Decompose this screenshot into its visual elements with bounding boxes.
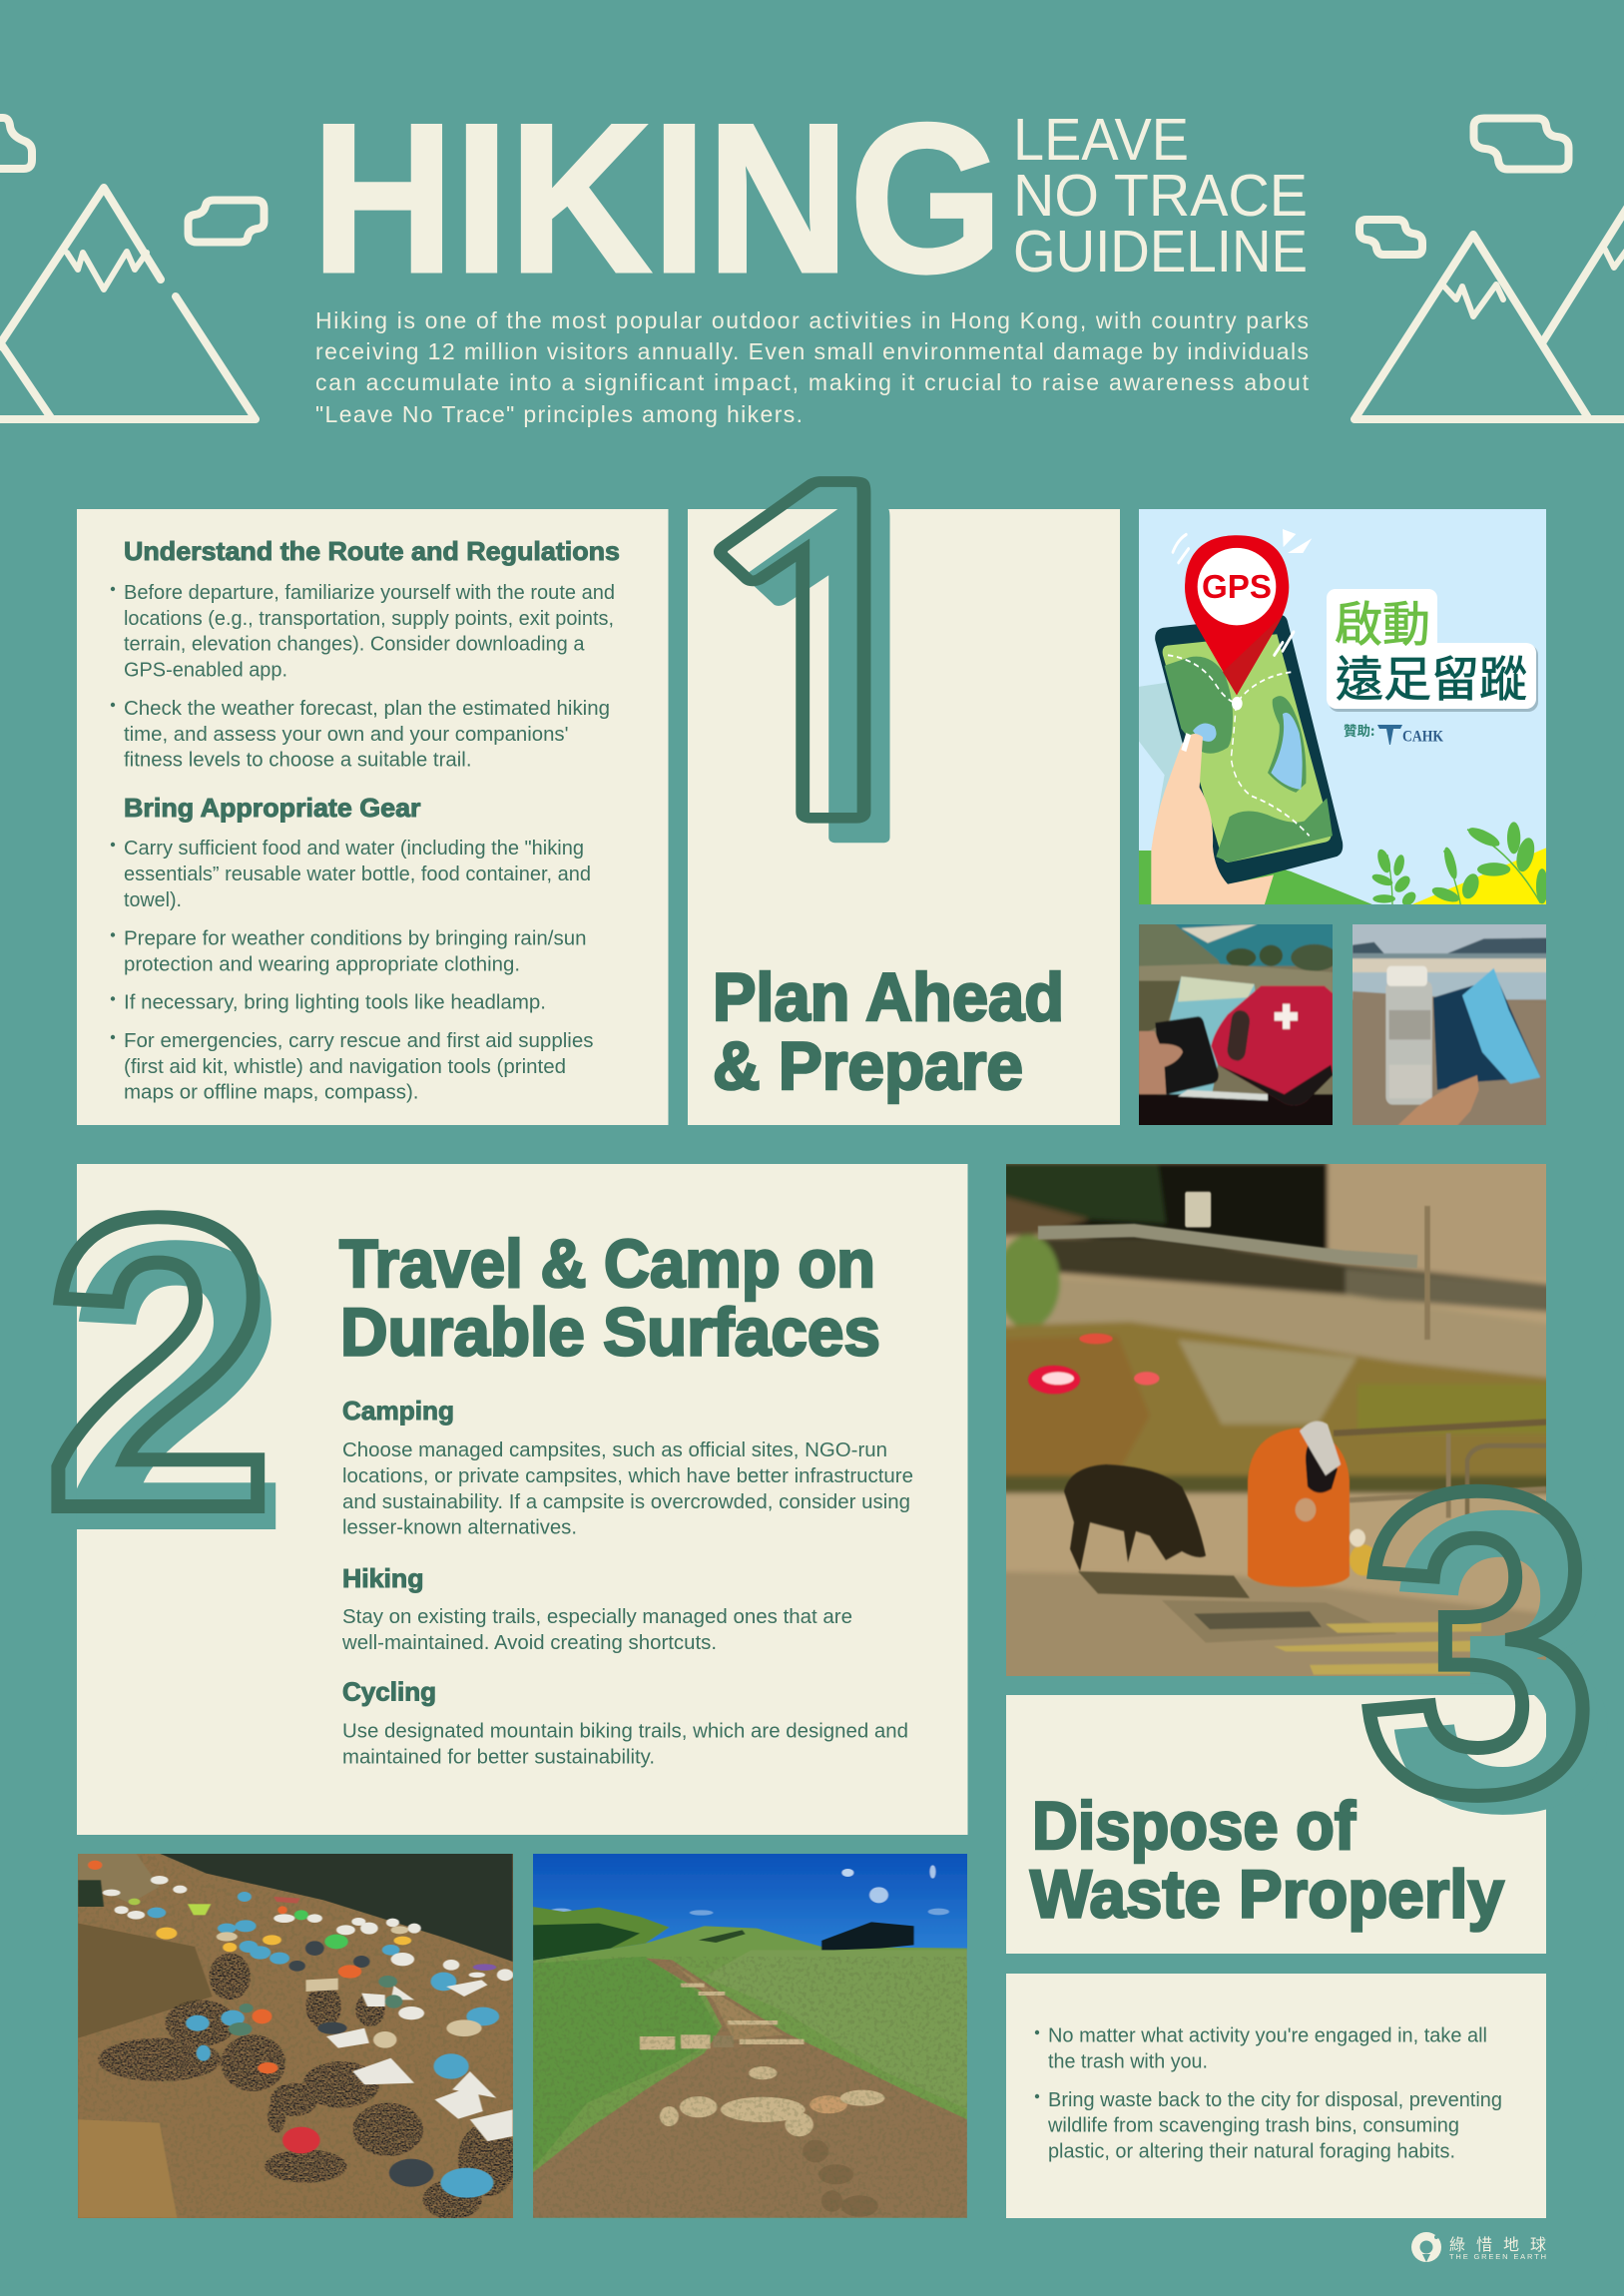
title: HIKING: HIKING [311, 80, 1003, 317]
subsection: camping: Choose managed campsites, such as official sites, NGO-run [342, 1439, 887, 1461]
number 2: 2 [62, 1154, 292, 1617]
intro paragraph: can accumulate into a significant impact, making it crucial to raise awareness about [315, 369, 1310, 395]
list: gear bullets: (first aid kit, whistle) and navigation tools (printed [124, 1056, 566, 1078]
intro paragraph: "Leave No Trace" principles among hikers. [315, 401, 803, 427]
subsection: hiking: well-maintained. Avoid creating shortcuts. [341, 1632, 717, 1654]
sponsor credit: CAHK [1402, 729, 1443, 745]
photo: crowded campsite [78, 1854, 517, 2219]
photo: water bottle and food pouch [1350, 919, 1549, 1130]
list: gear bullets: protection and wearing appropriate clothing. [124, 954, 520, 976]
list: route bullets: time, and assess your own and your companions' [124, 724, 569, 746]
heading: travel and camp [339, 1226, 880, 1370]
list: gear bullets: essentials” reusable water bottle, food container, and [124, 863, 591, 885]
subtitle: Leave No Trace Guideline: LEAVE [1013, 107, 1189, 173]
subsection: cycling: Use designated mountain biking trails, which are designed and [342, 1721, 908, 1743]
photo: wild boar at a rubbish bin [1006, 1164, 1546, 1676]
list: waste bullets: wildlife from scavenging trash bins, consuming [1047, 2114, 1459, 2136]
subsection: hiking [341, 1563, 852, 1654]
heading: understand the route: Understand the Route and Regulations [124, 536, 620, 566]
heading: plan ahead and prepare: & Prepare [713, 1028, 1023, 1104]
heading: plan ahead and prepare [713, 959, 1064, 1104]
photo: GPS app poster [1139, 509, 1548, 908]
logo: The Green Earth: THE GREEN EARTH [1449, 2252, 1546, 2261]
list: gear bullets: Prepare for weather conditions by bringing rain/sun [124, 928, 587, 950]
list: gear bullets: If necessary, bring lighting tools like headlamp. [124, 992, 546, 1014]
subsection: cycling [342, 1677, 908, 1769]
list: gear bullets: Carry sufficient food and water (including the "hiking [124, 838, 584, 860]
header illustration: left mountains and clouds [0, 118, 264, 419]
intro paragraph: receiving 12 million visitors annually. Even small environmental damage by individuals [315, 338, 1309, 364]
subsection: camping: locations, or private campsites, which have better infrastructure [342, 1465, 913, 1487]
heading: plan ahead and prepare: Plan Ahead [713, 959, 1064, 1035]
logo: The Green Earth: 綠惜地球 [1449, 2231, 1546, 2255]
subsection: camping: lesser-known alternatives. [342, 1517, 577, 1539]
list: waste bullets: No matter what activity you're engaged in, take all [1048, 2024, 1487, 2046]
number 3: 3 [1384, 1423, 1623, 1902]
number 1: 1 [647, 445, 994, 883]
photo: first aid kit and map [1135, 919, 1338, 1130]
list: route bullets [111, 582, 615, 771]
intro paragraph: Hiking is one of the most popular outdoor activities in Hong Kong, with country parks [315, 307, 1309, 333]
list: route bullets: Check the weather forecast, plan the estimated hiking [124, 698, 610, 720]
logo mark [1411, 2232, 1441, 2262]
subtitle: Leave No Trace Guideline [1013, 107, 1308, 285]
list: gear bullets: maps or offline maps, compass). [124, 1082, 419, 1104]
list: route bullets: terrain, elevation changes). Consider downloading a [124, 633, 585, 655]
list: route bullets: fitness levels to choose a suitable trail. [124, 749, 471, 771]
subtitle: Leave No Trace Guideline: NO TRACE [1013, 163, 1308, 229]
subsection: camping: Camping [342, 1396, 454, 1426]
intro paragraph [315, 307, 1310, 427]
subsection: cycling: Cycling [342, 1677, 436, 1707]
panel: dispose of waste title card [1006, 1695, 1546, 1954]
number 1: 1 [673, 470, 1020, 908]
heading: travel and camp: Travel & Camp on [339, 1226, 875, 1302]
panel: section 1 title card [688, 509, 1120, 1125]
sponsor credit [1344, 724, 1443, 745]
list: waste bullets: Bring waste back to the city for disposal, preventing [1048, 2089, 1502, 2111]
list: gear bullets: towel). [124, 889, 182, 911]
people clusters [98, 1954, 517, 2219]
poster title badges: 啟動 [1335, 585, 1430, 655]
subtitle: Leave No Trace Guideline: GUIDELINE [1013, 219, 1308, 285]
panel: travel and camp on durable surfaces [77, 1164, 968, 1835]
panel: waste guidance [1006, 1974, 1546, 2218]
subsection: camping [342, 1396, 913, 1539]
panel: plan ahead guidance [77, 509, 669, 1125]
subsection: hiking: Stay on existing trails, especially managed ones that are [342, 1606, 852, 1628]
list: waste bullets: the trash with you. [1048, 2050, 1208, 2072]
heading: dispose of waste properly [1030, 1788, 1504, 1933]
list: gear bullets [111, 838, 594, 1104]
number 3: 3 [1359, 1404, 1598, 1883]
photo: mountain trail under blue sky [529, 1850, 974, 2218]
poster title badges: 遠足留蹤 [1336, 640, 1527, 710]
heading: dispose of waste properly: Waste Properly [1030, 1857, 1504, 1933]
list: waste bullets [1035, 2024, 1502, 2162]
list: route bullets: GPS-enabled app. [124, 659, 287, 681]
logo: The Green Earth [1411, 2231, 1546, 2262]
list: route bullets: Before departure, familiarize yourself with the route and [124, 582, 615, 604]
subsection: camping: and sustainability. If a campsite is overcrowded, consider using [342, 1491, 910, 1513]
subsection: hiking: Hiking [342, 1563, 423, 1593]
subsection: cycling: maintained for better sustainability. [342, 1747, 655, 1769]
header illustration: right mountains and clouds [1354, 118, 1624, 419]
tents [147, 1892, 499, 2198]
sponsor credit: 贊助: [1344, 720, 1374, 740]
GPS pin label: GPS [1202, 568, 1272, 605]
heading: dispose of waste properly: Dispose of [1032, 1788, 1355, 1864]
poster title badges [1327, 585, 1538, 712]
list: waste bullets: plastic, or altering their natural foraging habits. [1048, 2140, 1455, 2162]
number 2: 2 [44, 1131, 274, 1594]
heading: travel and camp: Durable Surfaces [340, 1294, 880, 1370]
list: gear bullets: For emergencies, carry rescue and first aid supplies [124, 1030, 593, 1052]
list: route bullets: locations (e.g., transportation, supply points, exit points, [124, 608, 614, 630]
heading: bring appropriate gear: Bring Appropriate Gear [124, 793, 421, 823]
